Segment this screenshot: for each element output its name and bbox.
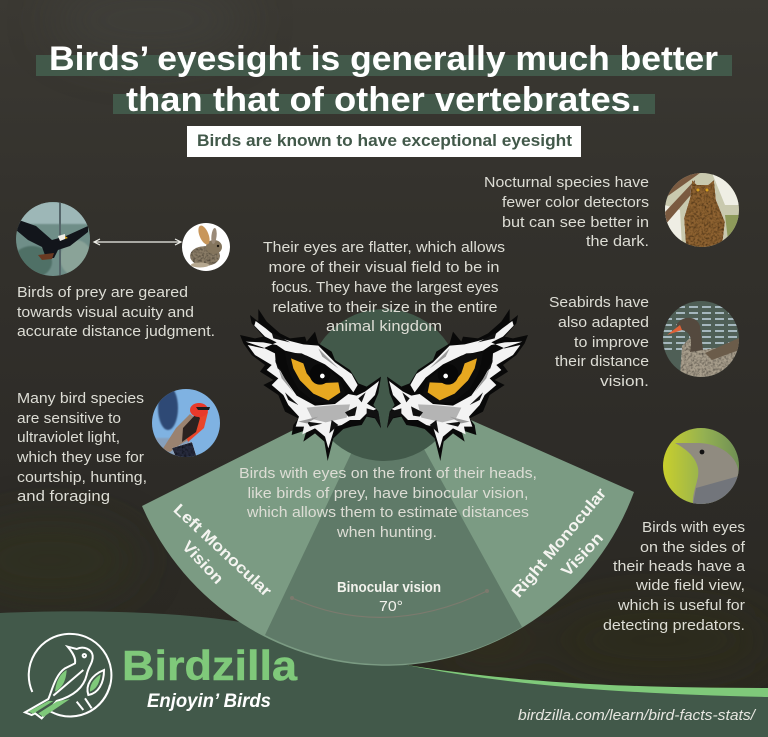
icon: rabbit photo (182, 223, 230, 271)
text: ultraviolet light: which they use for (16, 449, 144, 466)
text: nocturnal species: Nocturnal species have (484, 174, 649, 191)
icon: eagle photo (12, 202, 92, 278)
arrow: eagle to rabbit distance (94, 239, 181, 245)
icon: grey bird photo (663, 428, 739, 504)
text: ultraviolet light: are sensitive to (17, 410, 121, 427)
label: left monocular vision: Vision (178, 538, 226, 588)
logo (25, 634, 298, 718)
subtitle (187, 126, 581, 157)
text: seabirds: also adapted (558, 314, 649, 331)
text: flatter eyes: more of their visual field to be in (268, 259, 500, 276)
text: side eyes: on the sides of (640, 539, 746, 556)
text: side eyes: wide field view, (635, 577, 745, 594)
text: birds of prey: Birds of prey are geared (17, 284, 188, 301)
source url: birdzilla.com/learn/bird-facts-stats/ (518, 707, 757, 724)
footer band (0, 611, 768, 737)
title: than that of other vertebrates. (126, 81, 641, 119)
text: ultraviolet light: courtship, hunting, (17, 469, 147, 486)
text: ultraviolet light: ultraviolet light, (17, 429, 120, 446)
icon: bird logo (25, 634, 111, 718)
text: flatter eyes: relative to their size in the entire (272, 299, 498, 316)
text: flatter eyes: focus. They have the largest eyes (272, 279, 498, 296)
text: ultraviolet light: and foraging (17, 488, 110, 505)
text: side eyes: Birds with eyes (642, 519, 745, 536)
owl eyes illustration (240, 309, 528, 461)
logo wordmark: Birdzilla (122, 642, 298, 689)
text: side eyes (603, 519, 746, 634)
text: ultraviolet light (16, 390, 147, 505)
logo tagline: Enjoyin’ Birds (147, 691, 271, 712)
label: right monocular vision: Right Monocular (509, 485, 610, 601)
icon: goose photo (663, 301, 739, 377)
text: side eyes: their heads have a (613, 558, 746, 575)
panel: monocular fan (142, 383, 634, 666)
text: binocular vision explanation: when hunting. (336, 524, 437, 541)
label: left monocular vision: Left Monocular (170, 501, 274, 600)
text: seabirds: vision. (600, 373, 649, 390)
text: side eyes: detecting predators. (603, 617, 745, 634)
vision fan diagram (142, 309, 634, 666)
title (36, 40, 732, 119)
text: binocular vision explanation: which allows them to estimate distances (246, 504, 529, 521)
label: binocular vision 70 degrees (337, 579, 441, 615)
text: seabirds (549, 294, 649, 390)
text: birds of prey (17, 284, 215, 340)
text: binocular vision explanation: Birds with eyes on the front of their heads, (239, 465, 537, 482)
text: nocturnal species (484, 174, 649, 250)
text: side eyes: which is useful for (617, 597, 745, 614)
text: flatter eyes: Their eyes are flatter, which allows (263, 239, 505, 256)
text: ultraviolet light: Many bird species (17, 390, 144, 407)
subtitle: Birds are known to have exceptional eyesight (197, 131, 572, 150)
text: flatter eyes: animal kingdom (326, 318, 442, 335)
icon: owl photo (665, 173, 740, 247)
label: binocular vision 70 degrees: 70° (379, 598, 403, 615)
text: nocturnal species: fewer color detectors (502, 194, 649, 211)
text: seabirds: to improve (574, 334, 649, 351)
icon: red bird photo (152, 389, 220, 457)
label: right monocular vision: Vision (558, 530, 607, 580)
label: binocular vision 70 degrees: Binocular vision (337, 579, 441, 596)
text: binocular vision explanation (239, 465, 537, 541)
arc: binocular angle (290, 589, 489, 617)
panel: head circle (308, 309, 460, 461)
text: birds of prey: towards visual acuity and (17, 304, 194, 321)
text: seabirds: Seabirds have (549, 294, 649, 311)
text: flatter eyes (263, 239, 505, 335)
panel: binocular wedge (265, 380, 522, 664)
title: Birds’ eyesight is generally much better (49, 40, 718, 78)
text: seabirds: their distance (555, 353, 649, 370)
text: binocular vision explanation: like birds of prey, have binocular vision, (248, 485, 528, 502)
text: nocturnal species: the dark. (586, 233, 649, 250)
text: birds of prey: accurate distance judgment. (17, 323, 215, 340)
text: nocturnal species: but can see better in (502, 214, 649, 231)
